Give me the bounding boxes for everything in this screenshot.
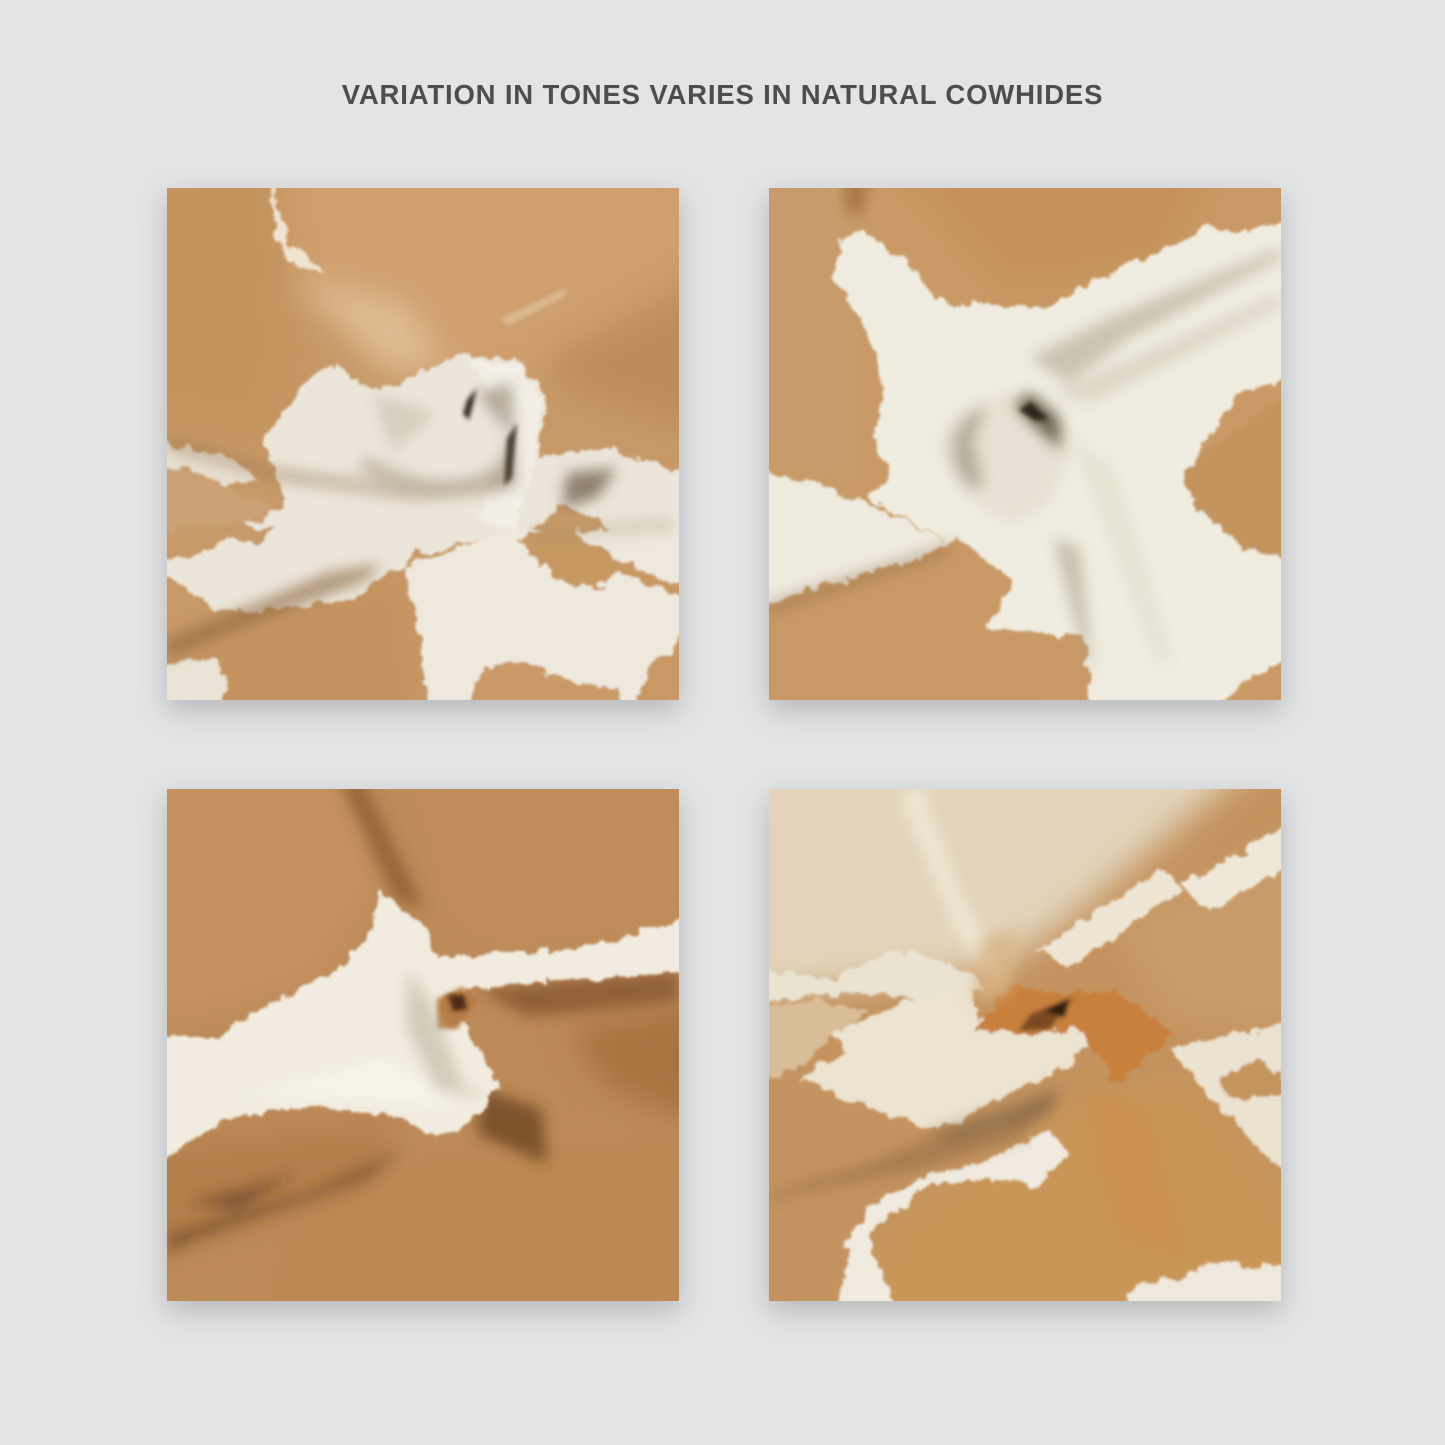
- panel: cowhide swatch top right: [769, 188, 1281, 700]
- panel: cowhide swatch bottom left: [167, 789, 679, 1301]
- title: VARIATION IN TONES VARIES IN NATURAL COWHIDES: [342, 79, 1103, 110]
- fold shadows: [769, 248, 1281, 678]
- tuft centre and shadows: [1019, 997, 1074, 1031]
- white markings: [749, 218, 1299, 718]
- fold shadows: [167, 383, 679, 658]
- panel: cowhide swatch top left: [167, 188, 679, 700]
- pale markings: [749, 819, 1299, 1319]
- white markings: [147, 178, 697, 718]
- white marking: [147, 889, 697, 1169]
- fold shadows on hide: [167, 779, 679, 1254]
- panel: cowhide swatch bottom right: [769, 789, 1281, 1301]
